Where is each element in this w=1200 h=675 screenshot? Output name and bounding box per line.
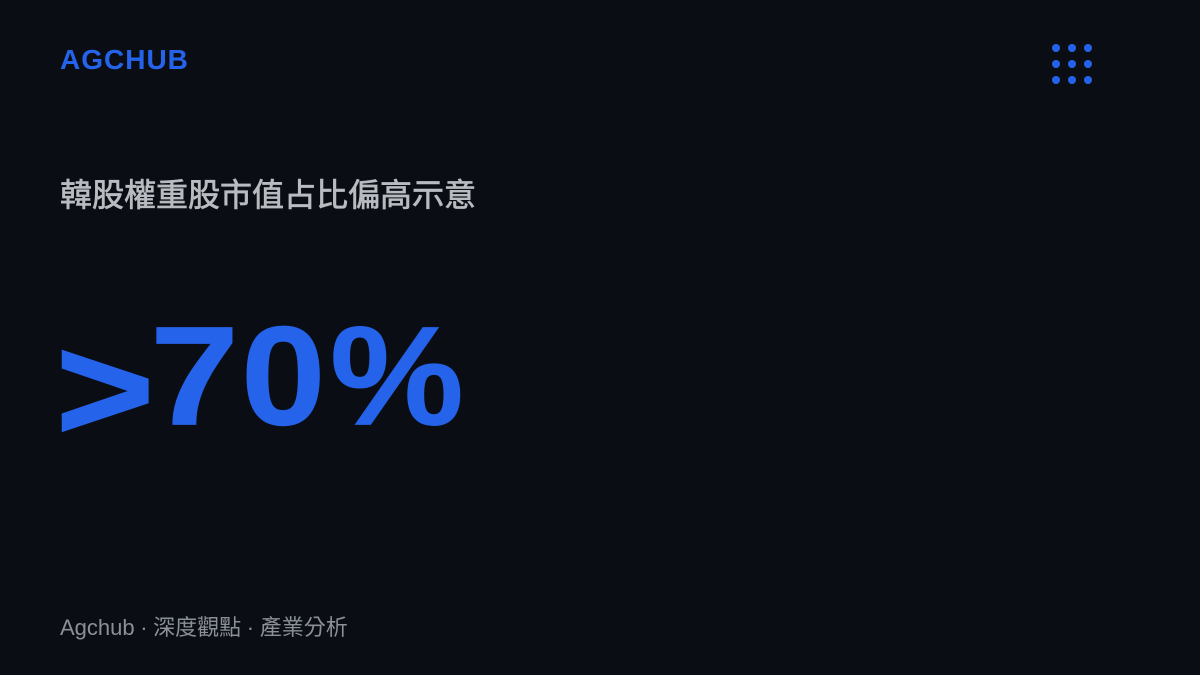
big statistic: 7 (150, 297, 239, 454)
footer text: Agchub · 深度觀點 · 產業分析 (60, 615, 348, 640)
brand logo: AGCHUB (60, 44, 189, 75)
big statistic: > (56, 306, 154, 471)
heading: 韓股權重股市值占比偏高示意 (60, 177, 476, 213)
big statistic (56, 297, 464, 471)
big statistic: 0 (241, 297, 326, 454)
big statistic: % (330, 297, 464, 454)
icon: dot grid (1052, 44, 1092, 84)
